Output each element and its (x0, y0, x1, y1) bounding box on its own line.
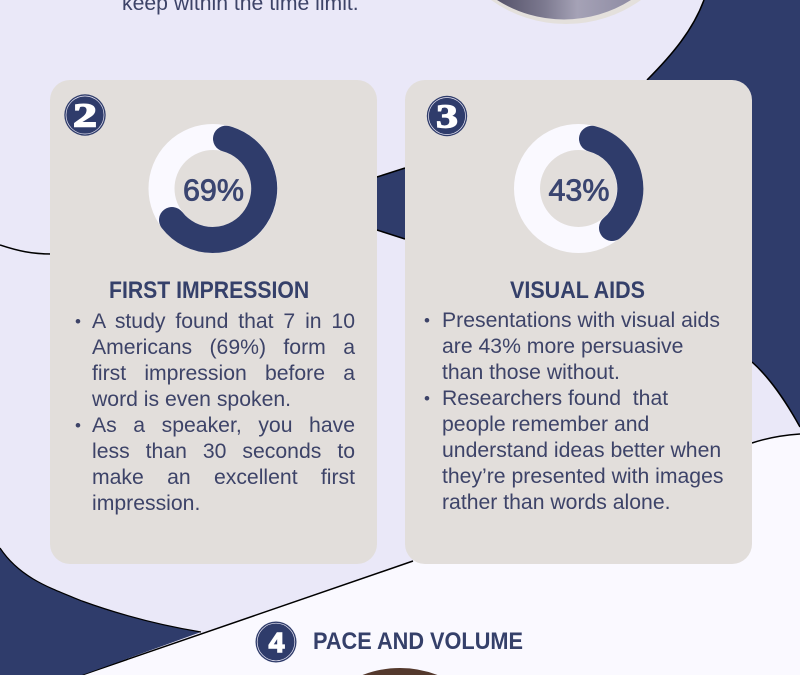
text block: first impression bullets: • (75, 312, 81, 331)
heading: first impression: FIRST IMPRESSION (109, 277, 309, 304)
text block: first impression bullets: make an excellent first (92, 466, 355, 489)
text block: first impression bullets: • (75, 416, 81, 435)
navy bottom-left blob (0, 548, 201, 675)
badge 2: 2 (73, 98, 97, 134)
text block: visual aids bullets: than those without. (442, 361, 620, 384)
text block: visual aids bullets (424, 309, 723, 514)
panel: visual aids (405, 80, 752, 564)
text block: first impression bullets: impression. (92, 492, 200, 515)
text block: first impression bullets: A study found that 7 in 10 (92, 310, 355, 333)
donut chart 43% (527, 137, 630, 240)
text block: visual aids bullets: Researchers found that (442, 387, 668, 410)
text block: visual aids bullets: • (424, 311, 430, 330)
heading: pace and volume: PACE AND VOLUME (313, 628, 523, 655)
text block: first impression bullets: word is even spoken. (92, 388, 291, 411)
badge 2 (64, 94, 106, 136)
text block: visual aids bullets: understand ideas better when (442, 439, 721, 462)
text block: visual aids bullets: people remember and (442, 413, 649, 436)
text block: visual aids bullets: • (424, 389, 430, 408)
panel: first impression (50, 80, 377, 564)
navy right blob (377, 0, 800, 427)
badge 4 (256, 622, 296, 662)
donut chart 43%: 43% (548, 174, 610, 208)
badge 4: 4 (269, 627, 285, 658)
donut chart 69% (162, 137, 264, 240)
text block: first impression bullets: first impression before a (92, 362, 355, 385)
text block: visual aids bullets: are 43% more persuasive (442, 335, 683, 358)
navy bottom-left outline (0, 548, 201, 632)
text block: first impression bullets: Americans (69%) form a (92, 336, 355, 359)
white region outlines (82, 434, 800, 675)
text block: visual aids bullets: Presentations with visual aids (442, 309, 720, 332)
photo bottom (362, 668, 438, 675)
navy blob outlines (377, 0, 800, 427)
photo top (491, 0, 641, 24)
text block: first impression bullets: As a speaker, you have (92, 414, 355, 437)
text block: visual aids bullets: rather than words alone. (442, 491, 670, 514)
badge 3 (427, 96, 467, 136)
text block: first impression bullets: less than 30 seconds to (92, 440, 355, 463)
curved line left (0, 245, 52, 254)
badge 3: 3 (436, 98, 458, 136)
heading: visual aids: VISUAL AIDS (510, 277, 645, 304)
text block: first impression bullets (75, 310, 356, 515)
white lower region (82, 434, 800, 675)
donut chart 69%: 69% (183, 174, 244, 208)
text block: visual aids bullets: they’re presented with images (442, 465, 723, 488)
